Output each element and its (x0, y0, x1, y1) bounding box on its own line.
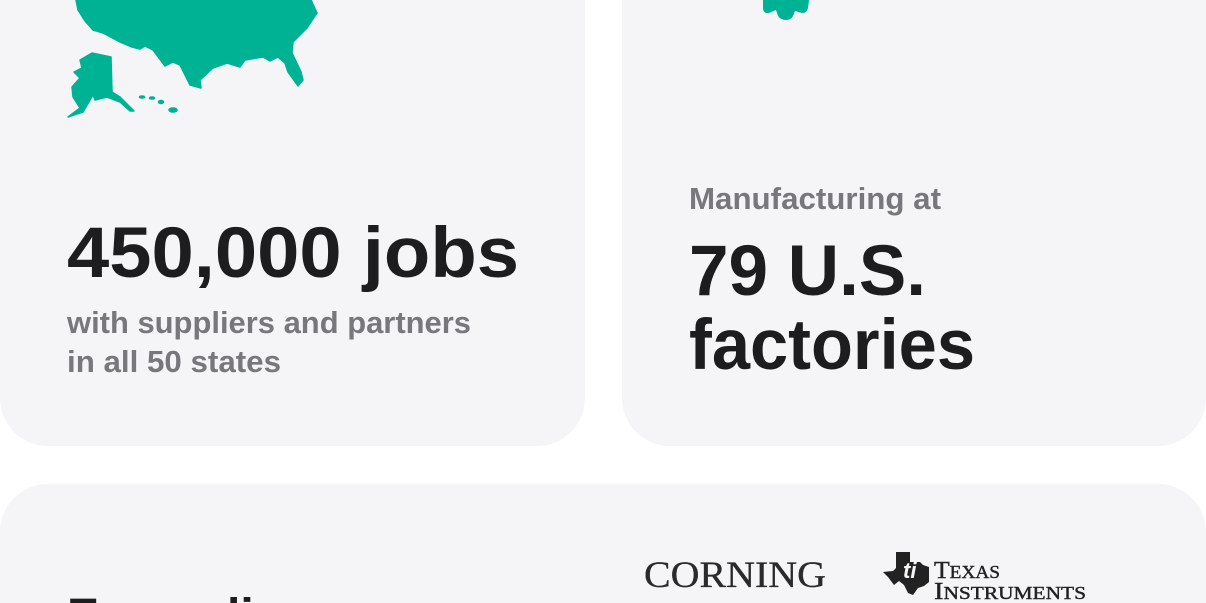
panel: U.S. jobs (0, 0, 585, 446)
logo: Corning: CORNING (644, 555, 826, 596)
stat: 79 U.S.: 79 U.S. (689, 232, 926, 311)
icon: factory marker (763, 0, 809, 20)
description: suppliers and partners: with suppliers and partners (66, 305, 471, 340)
description: all 50 states: in all 50 states (67, 344, 281, 379)
icon: Texas Instruments state mark: ti (903, 558, 917, 583)
label: manufacturing at: Manufacturing at (689, 181, 941, 216)
panel: U.S. factories (622, 0, 1206, 446)
stat: factories: factories (689, 306, 975, 385)
wordmark: Texas: TEXAS (934, 558, 1000, 584)
stat: 450,000 jobs: 450,000 jobs (67, 214, 519, 293)
icon: map of the United States (68, 0, 317, 117)
icon: Texas Instruments state mark (883, 552, 929, 595)
panel: expanding suppliers (0, 484, 1206, 603)
logo: Texas Instruments (883, 552, 1086, 603)
